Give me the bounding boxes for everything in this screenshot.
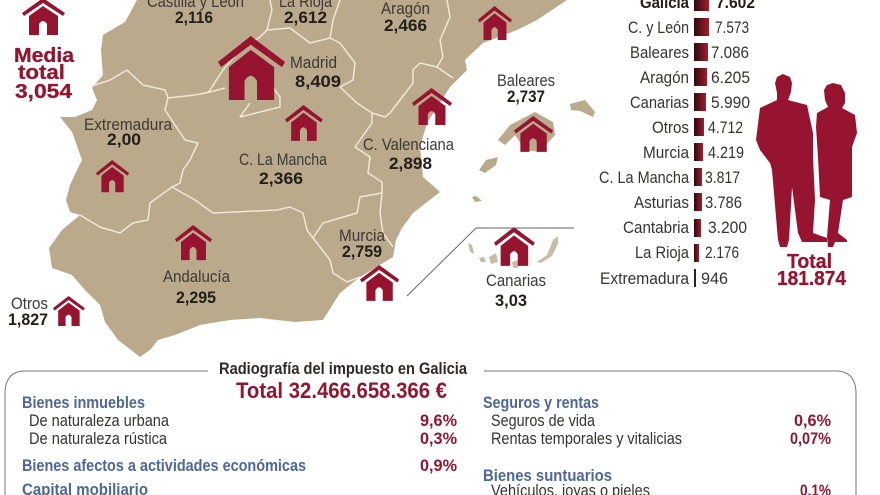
bar chart: taxpayers by region	[599, 0, 755, 288]
total amount: Total 32.466.658.366 €	[236, 378, 447, 403]
house: Cataluña	[478, 6, 512, 40]
Baleares islands	[472, 100, 595, 202]
mainland	[49, 0, 567, 357]
bar chart: taxpayers by region: C. La Mancha	[599, 169, 690, 187]
bar chart: taxpayers by region: 3.786	[705, 194, 742, 212]
left column: 9,6%	[420, 412, 457, 430]
total taxpayers	[777, 251, 847, 290]
bar chart: taxpayers by region: Murcia	[643, 144, 690, 162]
total taxpayers: 181.874	[777, 268, 847, 290]
label: Extremadura: Extremadura	[84, 116, 173, 134]
house: C. Valenciana	[412, 88, 452, 125]
label: Madrid: 8,409	[295, 73, 341, 91]
label: Murcia: 2,759	[342, 243, 382, 261]
label: Castilla y León	[147, 0, 244, 27]
house: media total	[22, 0, 65, 35]
bar chart: taxpayers by region: Extremadura	[600, 270, 690, 288]
label: Murcia	[339, 227, 386, 261]
label: Canarias: 3,03	[495, 292, 527, 310]
right column: Seguros y rentas	[483, 394, 599, 412]
left column: 0,9%	[420, 457, 457, 475]
label: Baleares: Baleares	[497, 72, 555, 90]
label: Otros: 1,827	[8, 311, 48, 329]
Canarias islands	[468, 236, 558, 268]
house: Murcia	[360, 265, 399, 301]
label: Aragón: Aragón	[381, 0, 430, 18]
right column: Seguros de vida	[491, 412, 596, 430]
bar chart: taxpayers by region: 6.205	[711, 69, 750, 87]
label: C. Valenciana: 2,898	[389, 155, 432, 173]
label: Extremadura: 2,00	[107, 131, 141, 149]
left column: Bienes afectos a actividades económicas	[22, 457, 306, 475]
bar chart: taxpayers by region: 946	[701, 270, 728, 288]
left column: Bienes inmuebles	[22, 394, 145, 412]
label: Aragón: 2,466	[384, 17, 427, 35]
label: C. La Mancha	[239, 151, 328, 188]
bar chart: taxpayers by region: La Rioja	[635, 244, 690, 262]
label: Andalucía	[163, 268, 231, 307]
right column: Rentas temporales y vitalicias	[491, 430, 682, 448]
label: Andalucía: 2,295	[176, 289, 216, 307]
house: Madrid	[218, 36, 285, 100]
bar chart: taxpayers by region: Canarias	[630, 94, 689, 112]
label: Madrid: Madrid	[290, 54, 337, 72]
bar chart: taxpayers by region: 3.200	[708, 219, 747, 237]
bar chart: taxpayers by region: 5.990	[711, 94, 750, 112]
bar chart: taxpayers by region: 4.219	[708, 144, 744, 162]
left column: De naturaleza urbana	[29, 412, 170, 430]
label: Baleares	[497, 72, 555, 106]
label: Canarias: Canarias	[486, 272, 546, 290]
label: Otros	[8, 295, 48, 329]
label: La Rioja	[279, 0, 333, 27]
left column	[22, 394, 457, 495]
label: C. Valenciana: C. Valenciana	[363, 136, 455, 154]
bar chart: taxpayers by region: Baleares	[630, 44, 689, 62]
media total: 3,054	[15, 81, 73, 103]
bar chart: taxpayers by region: 7.086	[711, 44, 749, 62]
label: La Rioja: 2,612	[284, 9, 327, 27]
house: Andalucía	[175, 225, 212, 260]
label: Canarias	[486, 272, 546, 310]
right column	[483, 394, 831, 495]
house: Baleares	[514, 116, 553, 152]
label: Baleares: 2,737	[507, 88, 545, 106]
bar chart: taxpayers by region: 7.573	[715, 19, 749, 37]
right column: 0,07%	[790, 430, 831, 448]
bar chart: taxpayers by region: Asturias	[634, 194, 689, 212]
bar chart: taxpayers by region: 4.712	[708, 119, 743, 137]
region borders	[80, 0, 453, 282]
label: Extremadura	[84, 116, 173, 149]
label: Aragón	[381, 0, 430, 35]
map of Spain	[49, 0, 595, 357]
media total: total	[18, 62, 65, 84]
media total	[14, 45, 75, 103]
bar chart: taxpayers by region: Aragón	[640, 69, 689, 87]
label: Castilla y León: 2,116	[175, 9, 213, 27]
heading: Radiografía del impuesto en Galicia	[219, 360, 468, 378]
media total: Media	[14, 45, 75, 67]
label: Murcia: Murcia	[339, 227, 386, 245]
label: C. Valenciana	[363, 136, 455, 173]
panel: Radiografía del impuesto en Galicia	[5, 360, 856, 495]
bar chart: taxpayers by region: Otros	[652, 119, 689, 137]
left column: De naturaleza rústica	[29, 430, 168, 448]
label: Andalucía: Andalucía	[163, 268, 231, 286]
left column: 0,3%	[420, 430, 457, 448]
house: Canarias	[494, 227, 535, 266]
bar chart: taxpayers by region: C. y León	[628, 19, 689, 37]
bar chart: taxpayers by region: 2.176	[705, 244, 739, 262]
house: C. La Mancha	[285, 105, 323, 141]
right column: Bienes suntuarios	[483, 467, 612, 485]
label: C. La Mancha: C. La Mancha	[239, 151, 328, 169]
bar chart: taxpayers by region: 3.817	[705, 169, 740, 187]
label: Madrid	[290, 54, 341, 91]
right column: 0,6%	[794, 412, 831, 430]
total taxpayers: Total	[787, 251, 832, 273]
icon: man and woman silhouettes	[756, 74, 857, 247]
house: Extremadura	[96, 160, 129, 192]
label: C. La Mancha: 2,366	[259, 170, 303, 188]
Canarias inset line	[407, 228, 574, 296]
house: Otros	[53, 296, 85, 326]
bar chart: taxpayers by region: Cantabria	[623, 219, 690, 237]
label: Otros: Otros	[11, 295, 48, 313]
